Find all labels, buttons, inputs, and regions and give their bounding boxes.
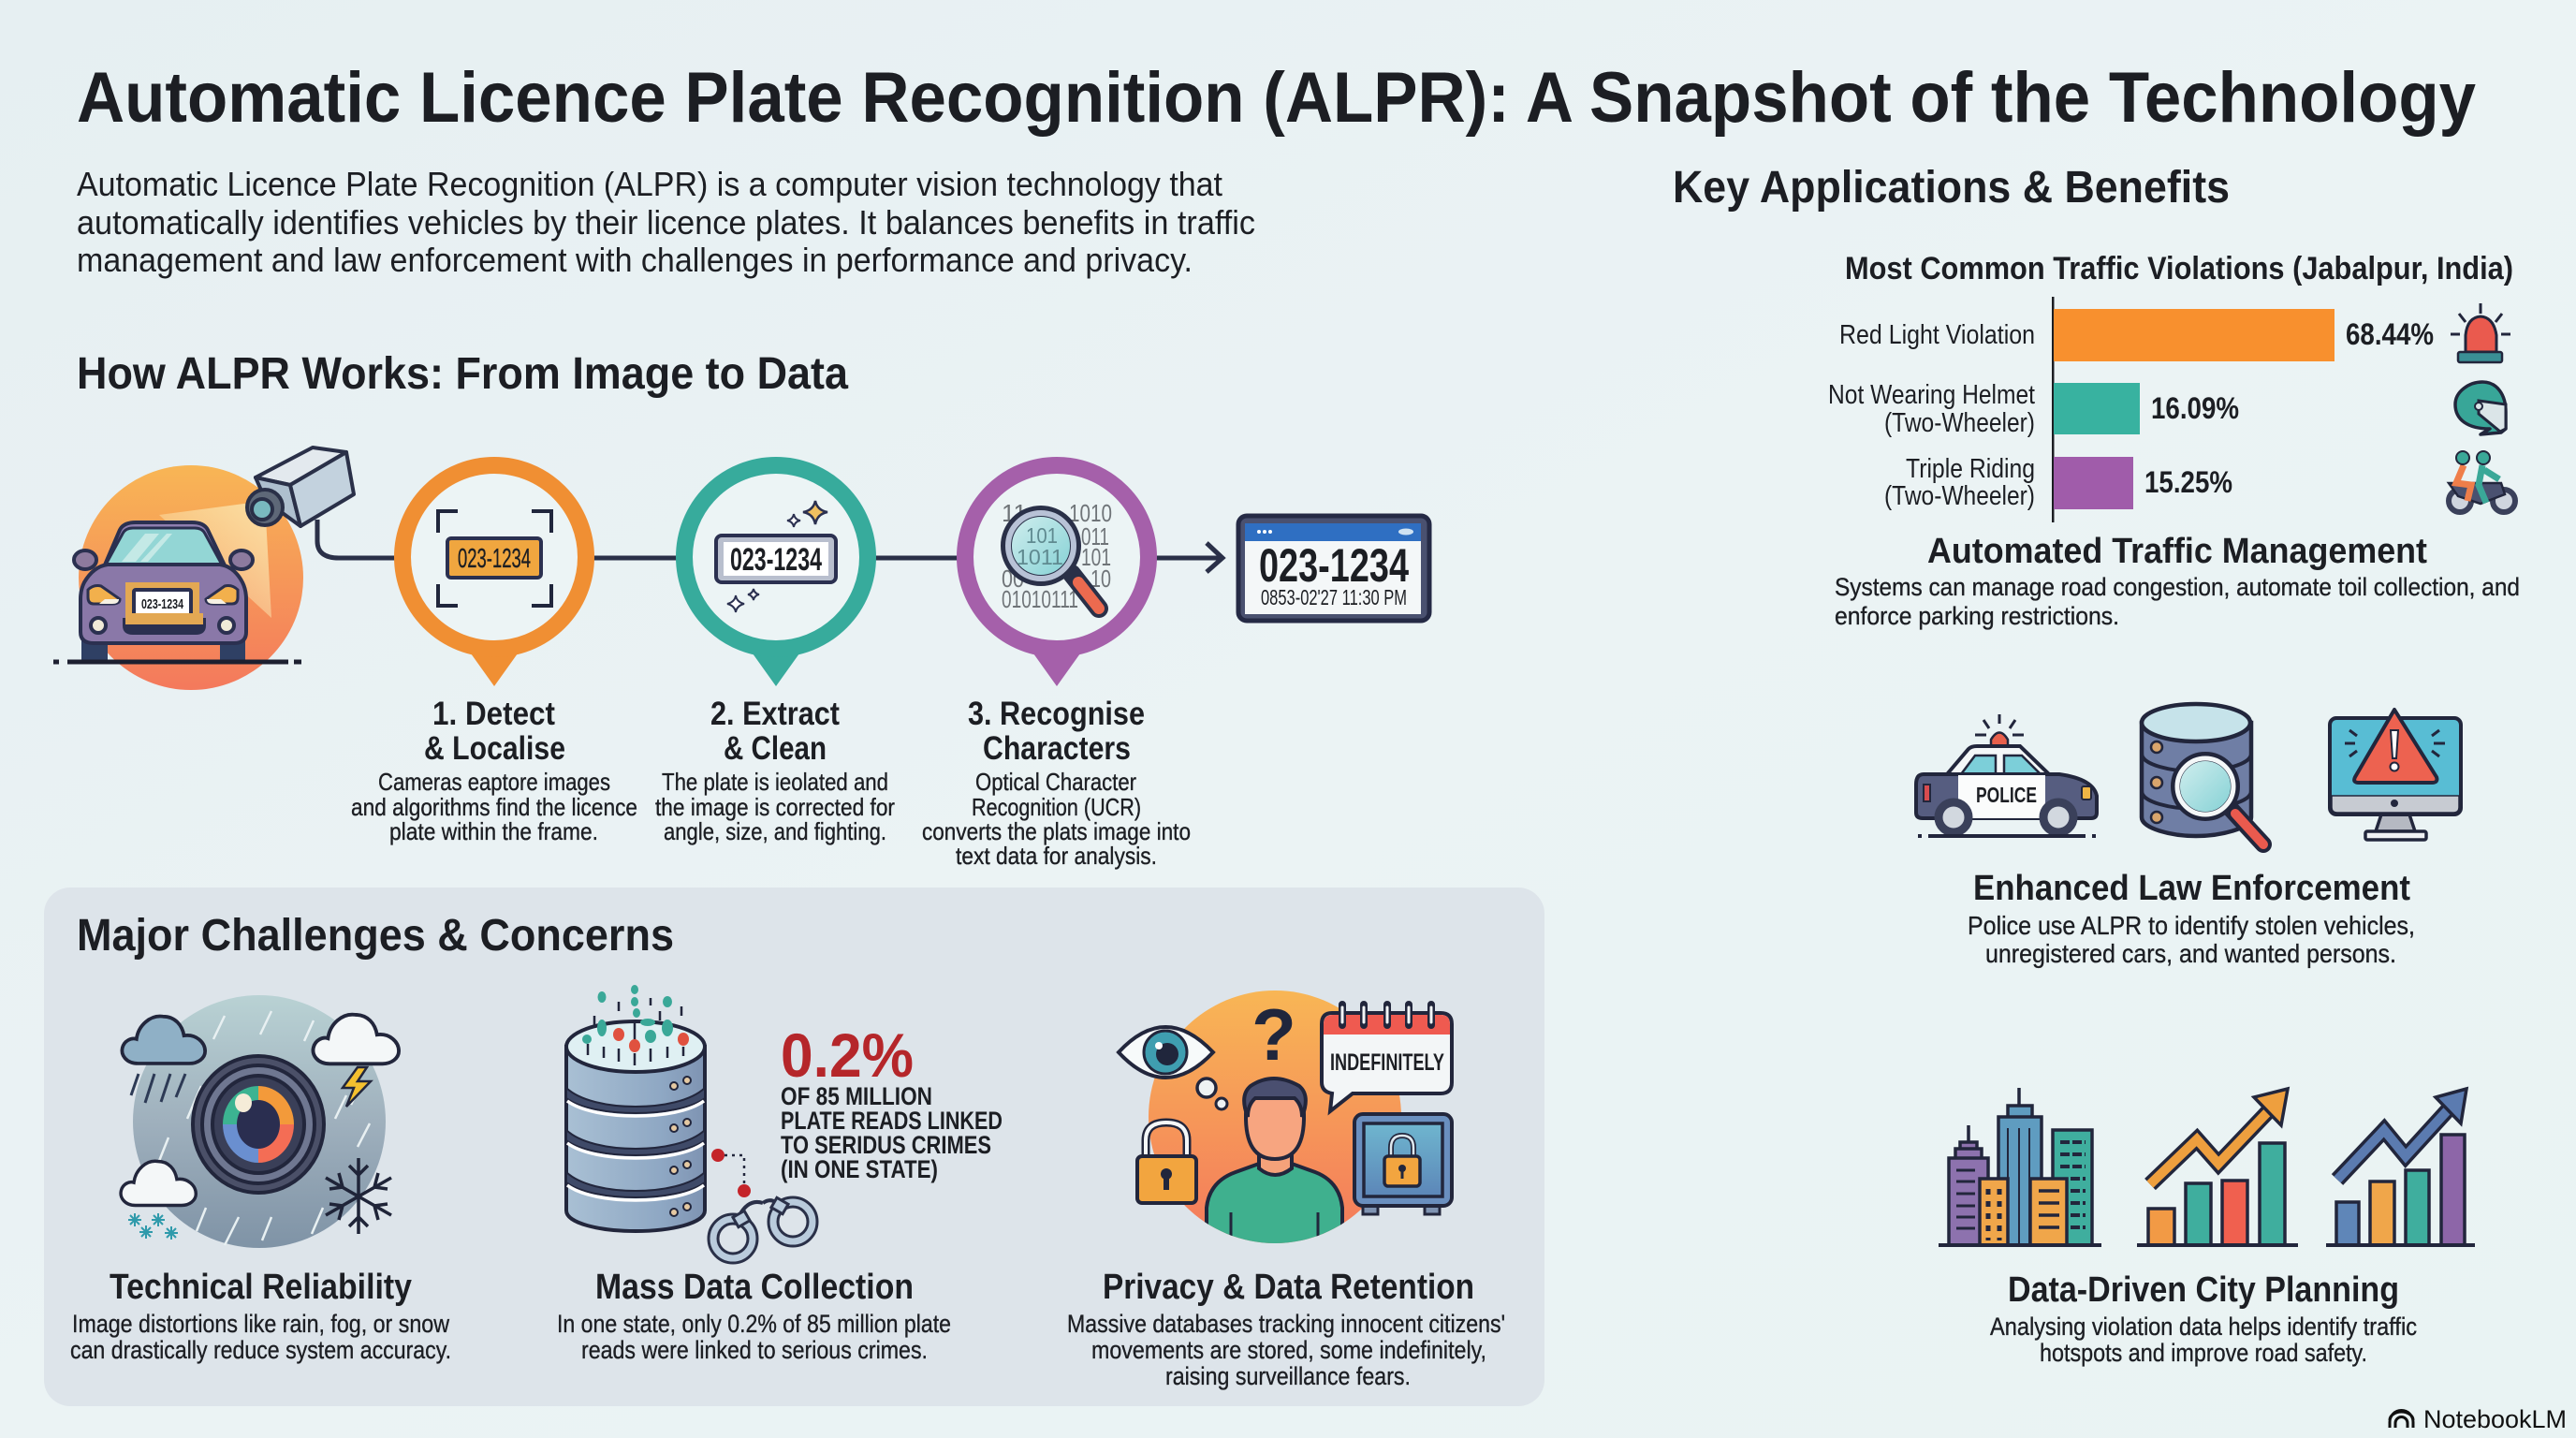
- step 3: recognise characters: [922, 465, 1191, 870]
- bar chart: traffic violations: (Two-Wheeler): [1884, 408, 2035, 438]
- step 3: recognise characters: converts the plats image into: [922, 817, 1191, 845]
- icon: privacy and retention: [1119, 990, 1452, 1245]
- output plate display: [1238, 516, 1429, 621]
- text: enhanced law enforcement: Enhanced Law Enforcement: [1973, 869, 2410, 908]
- callout: 0.2 percent: OF 85 MILLION: [781, 1082, 932, 1110]
- text: automated traffic management: [1835, 532, 2520, 630]
- step 3: recognise characters: 101: [1026, 523, 1058, 548]
- text: data-driven city planning: [1990, 1270, 2417, 1367]
- text: privacy and data retention: raising surveillance fears.: [1165, 1362, 1411, 1390]
- step 3: recognise characters: Recognition (UCR): [972, 793, 1141, 821]
- icon: camera in bad weather: [121, 995, 399, 1248]
- icon: police car: [1916, 714, 2097, 836]
- step 3: recognise characters: 10: [1090, 565, 1111, 593]
- step 3: recognise characters: 011: [1081, 522, 1109, 550]
- icon: database with data points: [566, 985, 751, 1231]
- text: mass data collection: [557, 1268, 951, 1364]
- icon: car under camera: 023-1234: [141, 596, 183, 612]
- icon: car under camera: [53, 465, 303, 690]
- step 3: recognise characters: 101: [1081, 543, 1111, 571]
- step 1: detect and localise: 023-1234: [458, 544, 531, 574]
- bar chart: traffic violations: Not Wearing Helmet: [1828, 380, 2035, 410]
- text: mass data collection: reads were linked to serious crimes.: [581, 1336, 928, 1364]
- icon: siren: [2451, 303, 2510, 362]
- text: technical reliability: Technical Reliability: [110, 1268, 412, 1307]
- callout: 0.2 percent: (IN ONE STATE): [781, 1155, 938, 1183]
- text: data-driven city planning: Analysing violation data helps identify traffic: [1990, 1313, 2417, 1341]
- text: privacy and data retention: Massive databases tracking innocent citizens': [1067, 1310, 1505, 1338]
- icon: motorbike riders: [2449, 451, 2515, 512]
- text: enhanced law enforcement: Police use ALPR to identify stolen vehicles,: [1968, 911, 2415, 940]
- step 2: extract and clean: the image is corrected for: [655, 793, 895, 821]
- heading: key applications: Key Applications & Benefits: [1673, 163, 2230, 213]
- output plate display: 0853-02'27 11:30 PM: [1261, 585, 1407, 609]
- arrow to output: [1207, 543, 1222, 572]
- callout: 0.2 percent: PLATE READS LINKED: [781, 1107, 1003, 1135]
- text: mass data collection: In one state, only 0.2% of 85 million plate: [557, 1310, 951, 1338]
- icon: privacy and retention: ?: [1251, 993, 1296, 1076]
- chart title: Most Common Traffic Violations (Jabalpur, India): [1845, 251, 2513, 286]
- step 1: detect and localise: Cameras eaptore images: [378, 768, 610, 796]
- text: technical reliability: can drastically reduce system accuracy.: [70, 1336, 451, 1364]
- text: privacy and data retention: Privacy & Data Retention: [1103, 1268, 1474, 1307]
- bar chart: traffic violations: (Two-Wheeler): [1884, 481, 2035, 511]
- heading: how ALPR works: How ALPR Works: From Image to Data: [77, 349, 848, 399]
- icon: growth chart orange: [2137, 1089, 2298, 1245]
- intro paragraph: automatically identifies vehicles by their licence plates. It balances benefits in traffic: [77, 203, 1255, 242]
- icon: database with magnifier: [2142, 704, 2263, 844]
- icon: handcuffs: [713, 1197, 812, 1258]
- step 2: extract and clean: [655, 465, 895, 845]
- bar chart: traffic violations: 16.09%: [2151, 391, 2239, 425]
- step 1: detect and localise: & Localise: [424, 730, 565, 767]
- text: enhanced law enforcement: unregistered cars, and wanted persons.: [1985, 939, 2396, 968]
- text: privacy and data retention: movements are stored, some indefinitely,: [1091, 1336, 1486, 1364]
- heading: major challenges: Major Challenges & Concerns: [77, 911, 674, 961]
- text: data-driven city planning: hotspots and improve road safety.: [2040, 1339, 2367, 1367]
- step 3: recognise characters: Optical Character: [975, 768, 1136, 796]
- callout: 0.2 percent: [781, 1020, 1003, 1183]
- output plate display: 023-1234: [1259, 539, 1409, 592]
- text: technical reliability: [70, 1268, 451, 1364]
- icon: alert monitor: [2330, 710, 2461, 840]
- bar chart: traffic violations: [1828, 297, 2434, 522]
- icon: security camera: [247, 448, 354, 526]
- step 2: extract and clean: The plate is ieolated and: [662, 768, 888, 796]
- step 3: recognise characters: 00: [1002, 565, 1024, 593]
- text: privacy and data retention: [1067, 1268, 1505, 1390]
- step 2: extract and clean: 2. Extract: [710, 696, 840, 732]
- step 2: extract and clean: angle, size, and fighting.: [664, 817, 886, 845]
- bar chart: traffic violations: Red Light Violation: [1839, 320, 2035, 350]
- step 1: detect and localise: 1. Detect: [432, 696, 555, 732]
- intro paragraph: [77, 165, 1255, 279]
- icon: police car: POLICE: [1976, 783, 2037, 807]
- step 3: recognise characters: 11: [1002, 499, 1027, 527]
- step 3: recognise characters: 01010111: [1002, 585, 1078, 613]
- bar chart: traffic violations: 15.25%: [2144, 465, 2232, 499]
- NotebookLM logo: NotebookLM: [2423, 1405, 2567, 1433]
- text: data-driven city planning: Data-Driven City Planning: [2008, 1270, 2399, 1310]
- panel: major challenges: [44, 888, 1544, 1406]
- step 1: detect and localise: [351, 465, 637, 845]
- text: automated traffic management: Automated Traffic Management: [1927, 532, 2427, 571]
- intro paragraph: Automatic Licence Plate Recognition (ALPR) is a computer vision technology that: [77, 165, 1222, 203]
- step 1: detect and localise: plate within the frame.: [389, 817, 598, 845]
- callout: 0.2 percent: TO SERIDUS CRIMES: [781, 1131, 991, 1159]
- text: automated traffic management: enforce parking restrictions.: [1835, 602, 2119, 630]
- connector line: [317, 520, 1220, 558]
- step 2: extract and clean: 023-1234: [730, 542, 822, 578]
- step 3: recognise characters: text data for analysis.: [956, 842, 1157, 870]
- step 3: recognise characters: Characters: [983, 730, 1131, 767]
- text: mass data collection: Mass Data Collection: [595, 1268, 914, 1307]
- step 3: recognise characters: 3. Recognise: [968, 696, 1145, 732]
- bar chart: traffic violations: Triple Riding: [1906, 454, 2035, 484]
- text: technical reliability: Image distortions like rain, fog, or snow: [72, 1310, 449, 1338]
- icon: helmet: [2455, 382, 2506, 434]
- text: enhanced law enforcement: [1968, 869, 2415, 968]
- icon: privacy and retention: INDEFINITELY: [1330, 1049, 1444, 1076]
- step 1: detect and localise: and algorithms find the licence: [351, 793, 637, 821]
- step 2: extract and clean: & Clean: [724, 730, 827, 767]
- callout: 0.2 percent: 0.2%: [781, 1020, 914, 1090]
- step 3: recognise characters: 1010: [1069, 499, 1112, 527]
- text: automated traffic management: Systems can manage road congestion, automate toil collection, and: [1835, 573, 2520, 601]
- title: Automatic Licence Plate Recognition (ALPR): A Snapshot of the Technology: [77, 58, 2476, 138]
- step 3: recognise characters: 1011: [1017, 545, 1063, 569]
- bar chart: traffic violations: 68.44%: [2346, 317, 2434, 351]
- icon: city buildings: [1939, 1088, 2101, 1245]
- icon: growth chart blue: [2326, 1089, 2475, 1245]
- intro paragraph: management and law enforcement with challenges in performance and privacy.: [77, 241, 1193, 279]
